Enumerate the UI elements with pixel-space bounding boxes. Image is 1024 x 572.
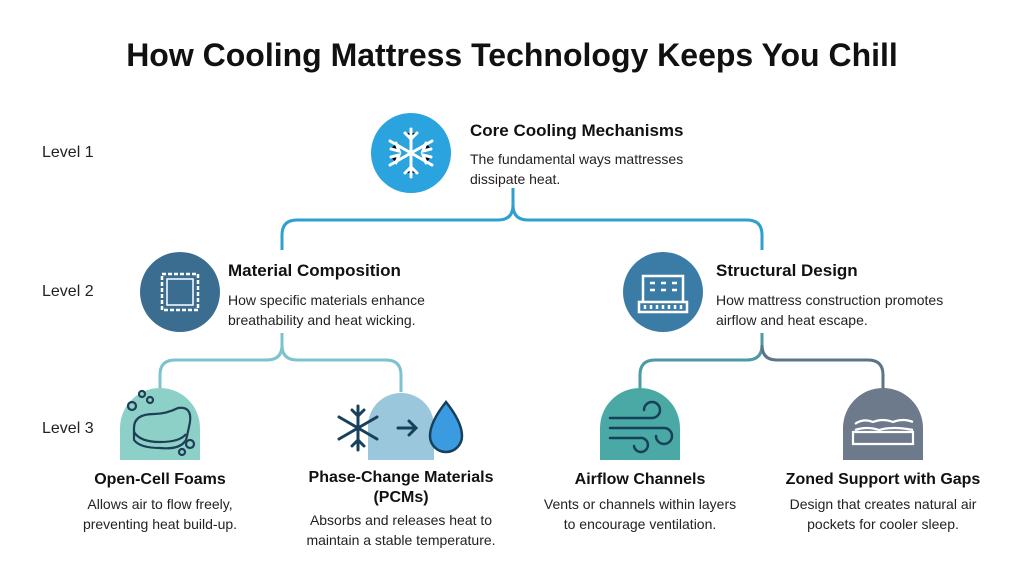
level 3: open-cell foams: Allows air to flow freely, preventing heat build-up.: [83, 496, 237, 532]
icon: sponge: [120, 388, 200, 460]
level labels: Level 2: [42, 283, 94, 300]
node: core cooling: The fundamental ways mattresses dissipate heat.: [470, 151, 683, 187]
level 3: open-cell foams: [83, 388, 237, 532]
node: material composition: Material Composition: [228, 261, 401, 280]
node: core cooling: Core Cooling Mechanisms: [470, 121, 683, 140]
level 3: phase-change materials: Absorbs and releases heat to maintain a stable temperature.: [306, 512, 496, 548]
level 3: airflow channels: Airflow Channels: [575, 471, 705, 488]
icon: snowflake: [371, 113, 451, 193]
icon: fabric: [140, 252, 220, 332]
level 3: zoned support: Design that creates natural air pockets for cooler sleep.: [790, 496, 976, 532]
icon: wind: [600, 388, 680, 460]
level 3: phase-change materials: Phase-Change Materials: [309, 469, 493, 486]
level 3: airflow channels: [544, 388, 736, 532]
level 3: zoned support: [786, 388, 980, 532]
icon: body on mattress: [843, 388, 923, 460]
node: structural design: Structural Design: [716, 261, 858, 280]
node: core cooling: [371, 113, 683, 193]
icon: mattress: [623, 252, 703, 332]
icon: snowflake to drop: [337, 393, 464, 460]
node: structural design: How mattress construction promotes airflow and heat escape.: [716, 292, 943, 328]
level 3: airflow channels: Vents or channels within layers to encourage ventilation.: [544, 496, 736, 532]
level labels: Level 1: [42, 144, 94, 161]
level labels: Level 3: [42, 420, 94, 437]
level 3: phase-change materials: (PCMs): [373, 489, 429, 506]
node: material composition: [140, 252, 425, 332]
level labels: [42, 144, 94, 437]
level 3: open-cell foams: Open-Cell Foams: [94, 471, 226, 488]
node: material composition: How specific materials enhance breathability and heat wicking.: [228, 292, 425, 328]
title: How Cooling Mattress Technology Keeps You Chill: [126, 37, 898, 73]
node: structural design: [623, 252, 943, 332]
level 3: zoned support: Zoned Support with Gaps: [786, 471, 980, 488]
level 3: phase-change materials: [306, 393, 496, 548]
